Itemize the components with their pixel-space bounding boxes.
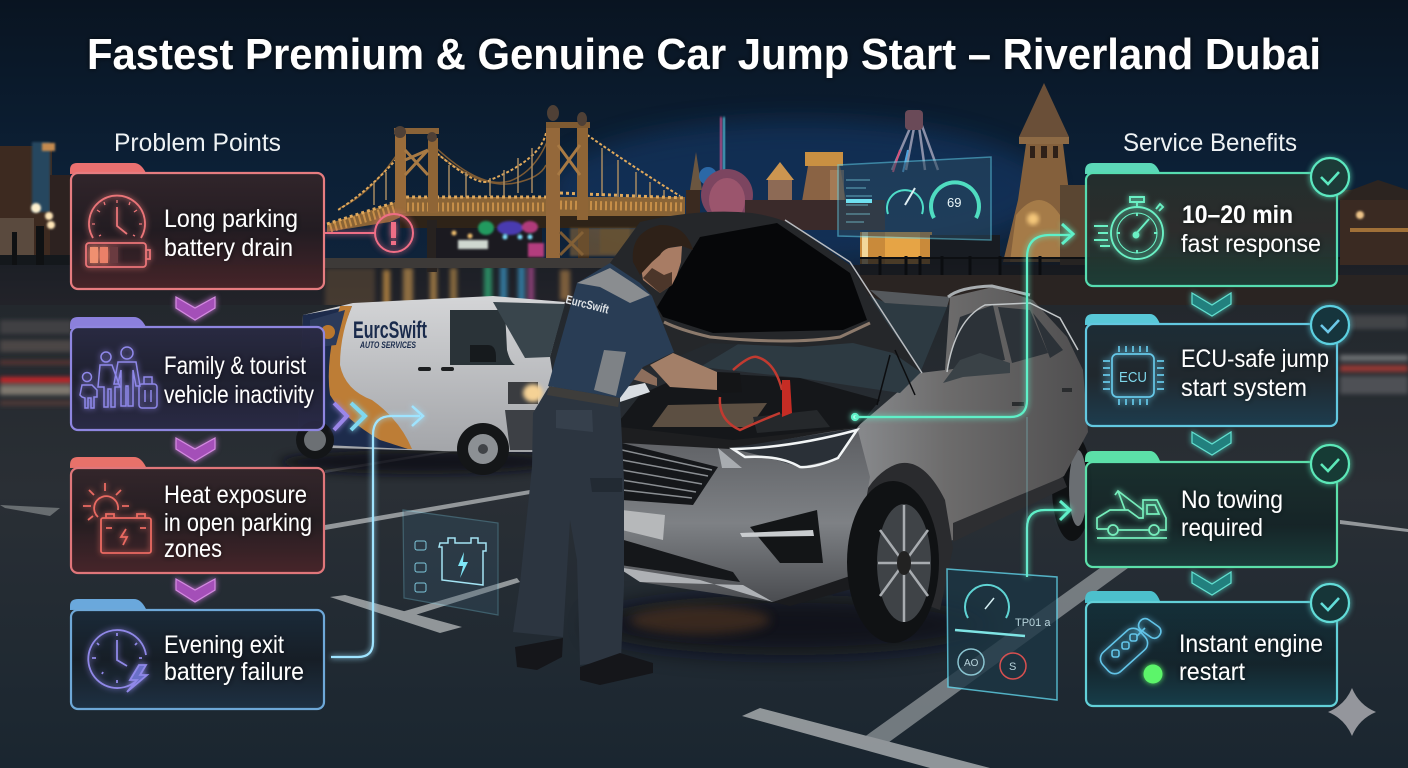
belt xyxy=(547,386,620,407)
chevron: benefit 2 to 3 xyxy=(1192,432,1231,455)
icon: stopwatch xyxy=(1094,197,1163,259)
chevron: benefit 1 to 2 xyxy=(1192,293,1231,316)
text: restart xyxy=(1179,658,1245,686)
windshield xyxy=(700,296,947,393)
headlight xyxy=(730,428,857,467)
car side body xyxy=(850,287,1088,575)
roof top xyxy=(870,290,950,307)
text: battery drain xyxy=(164,234,293,262)
panel: family and tourist vehicle inactivity xyxy=(70,317,324,430)
roof rail xyxy=(948,286,1030,297)
icon: clock with lightning bolt xyxy=(88,630,147,692)
background: blue skyline glow xyxy=(550,120,1050,260)
trousers xyxy=(513,388,624,665)
text xyxy=(164,205,298,262)
background: water with light reflections xyxy=(0,265,1408,315)
shirt xyxy=(548,263,674,398)
icon: ECU chip xyxy=(1103,346,1164,405)
panel: long parking battery drain xyxy=(70,163,324,289)
boots xyxy=(515,638,563,670)
panel: no towing required xyxy=(1085,445,1349,567)
chevron: problem 3 to 4 xyxy=(176,579,215,602)
text: fast response xyxy=(1181,230,1321,258)
black glove xyxy=(717,372,742,393)
far arm xyxy=(628,363,657,386)
connector: battery drain alert xyxy=(325,214,413,252)
icon: tow truck xyxy=(1097,491,1167,538)
shadow under car xyxy=(590,595,990,655)
face xyxy=(640,246,682,293)
grille xyxy=(622,443,718,505)
heading: Problem Points: Problem Points xyxy=(114,129,281,157)
bridge xyxy=(325,105,690,272)
upper dark band xyxy=(620,427,857,449)
car front xyxy=(616,427,870,602)
icon: clock over draining battery xyxy=(86,196,150,267)
holographic battery panel xyxy=(403,510,498,615)
text: start system xyxy=(1181,374,1307,402)
text: Instant engine xyxy=(1179,630,1323,658)
SUV xyxy=(610,212,1092,643)
text: Evening exit xyxy=(164,631,284,659)
text xyxy=(164,481,312,563)
connector: faint link line xyxy=(1026,417,1028,577)
front wheel xyxy=(847,481,939,643)
chrome trim xyxy=(718,448,742,468)
check badge xyxy=(1311,584,1349,622)
chevron: problem 1 to 2 xyxy=(176,297,215,320)
silver lip xyxy=(617,567,773,602)
panel: evening exit battery failure xyxy=(70,599,324,709)
check badge xyxy=(1311,158,1349,196)
text: battery failure xyxy=(164,658,304,686)
icon: family with luggage xyxy=(80,347,157,408)
panel readout: TP01 a xyxy=(1015,617,1051,629)
text: Heat exposure xyxy=(164,481,307,509)
chevron: benefit 3 to 4 xyxy=(1192,572,1231,595)
van seen through arm gap xyxy=(620,383,650,402)
panel: 10-20 min fast response xyxy=(1085,158,1349,286)
text: 10–20 min xyxy=(1182,201,1293,229)
jumper clamps xyxy=(782,380,792,417)
title: Fastest Premium & Genuine Car Jump Start – Riverland Dubai xyxy=(87,30,1321,79)
text: zones xyxy=(164,535,222,563)
panel: ECU-safe jump start system xyxy=(1085,306,1349,426)
van logo: EurcSwift xyxy=(353,317,427,344)
side mirror xyxy=(943,353,1010,383)
van chevrons xyxy=(334,403,365,430)
sill xyxy=(953,477,1067,542)
beard xyxy=(643,268,672,293)
parking lines xyxy=(0,430,1408,768)
open hood xyxy=(610,212,922,373)
status dot xyxy=(1144,664,1162,684)
hood strut xyxy=(877,350,915,405)
background: blurred traffic light streaks right xyxy=(1340,315,1408,394)
wheel arch xyxy=(852,463,953,610)
text: ECU-safe jump xyxy=(1181,345,1329,373)
gauge readout: 69 xyxy=(947,195,961,210)
check badge xyxy=(1311,306,1349,344)
hair xyxy=(633,225,693,275)
text: Family & tourist xyxy=(164,352,306,380)
door handle xyxy=(1012,388,1072,406)
connector arrow: dashboard to no towing xyxy=(1027,501,1070,577)
text xyxy=(164,352,314,409)
bumper black xyxy=(773,575,855,606)
connector arrow: car to fast response xyxy=(852,224,1073,420)
background: blurred traffic light streaks left xyxy=(0,320,72,406)
panel label S: S xyxy=(1009,661,1016,673)
van tagline: AUTO SERVICES xyxy=(359,340,416,350)
panel: heat exposure in open parking zones xyxy=(70,457,324,573)
heading: Service Benefits: Service Benefits xyxy=(1123,129,1297,157)
windows xyxy=(947,305,1063,370)
shirt logo: EurcSwift xyxy=(564,292,610,317)
panel: instant engine restart xyxy=(1085,584,1349,706)
text xyxy=(1179,630,1323,686)
technician xyxy=(513,225,742,685)
check badge xyxy=(1311,445,1349,483)
text: in open parking xyxy=(164,509,312,537)
background: castle tower xyxy=(1003,83,1090,265)
jumper cables xyxy=(720,357,782,430)
warm light under car xyxy=(630,606,770,634)
rear wheel xyxy=(1052,433,1092,541)
holographic diagnostic panel bottom xyxy=(947,569,1057,700)
text: Long parking xyxy=(164,205,298,233)
ECU label: ECU xyxy=(1119,369,1147,386)
background: theme-park towers and rides xyxy=(686,110,1000,265)
number plate xyxy=(622,510,665,540)
sparkle watermark xyxy=(1328,688,1376,736)
text: vehicle inactivity xyxy=(164,381,314,409)
background: right waterfront building xyxy=(1338,180,1408,265)
text xyxy=(1181,201,1321,258)
panel label AO: AO xyxy=(964,658,979,669)
text xyxy=(1181,486,1283,542)
icon: sun and hot battery xyxy=(83,483,151,553)
background: parking ground xyxy=(0,305,1408,768)
text xyxy=(164,631,304,686)
background: left waterfront building xyxy=(0,142,70,308)
connector arrow: evening failure to van xyxy=(331,406,423,657)
lower intake xyxy=(617,538,740,582)
holographic dashboard panel top xyxy=(838,157,991,240)
text: required xyxy=(1181,514,1263,542)
text: No towing xyxy=(1181,486,1283,514)
background: night sky xyxy=(0,0,1408,285)
engine bay xyxy=(620,372,880,445)
forearm xyxy=(650,353,717,390)
service van xyxy=(280,296,565,475)
icon: car key fob xyxy=(1097,616,1163,677)
background: promenade fence and wall xyxy=(860,256,1408,305)
chevron: problem 2 to 3 xyxy=(176,438,215,461)
fog lamp intake xyxy=(750,510,823,563)
text xyxy=(1181,345,1329,402)
